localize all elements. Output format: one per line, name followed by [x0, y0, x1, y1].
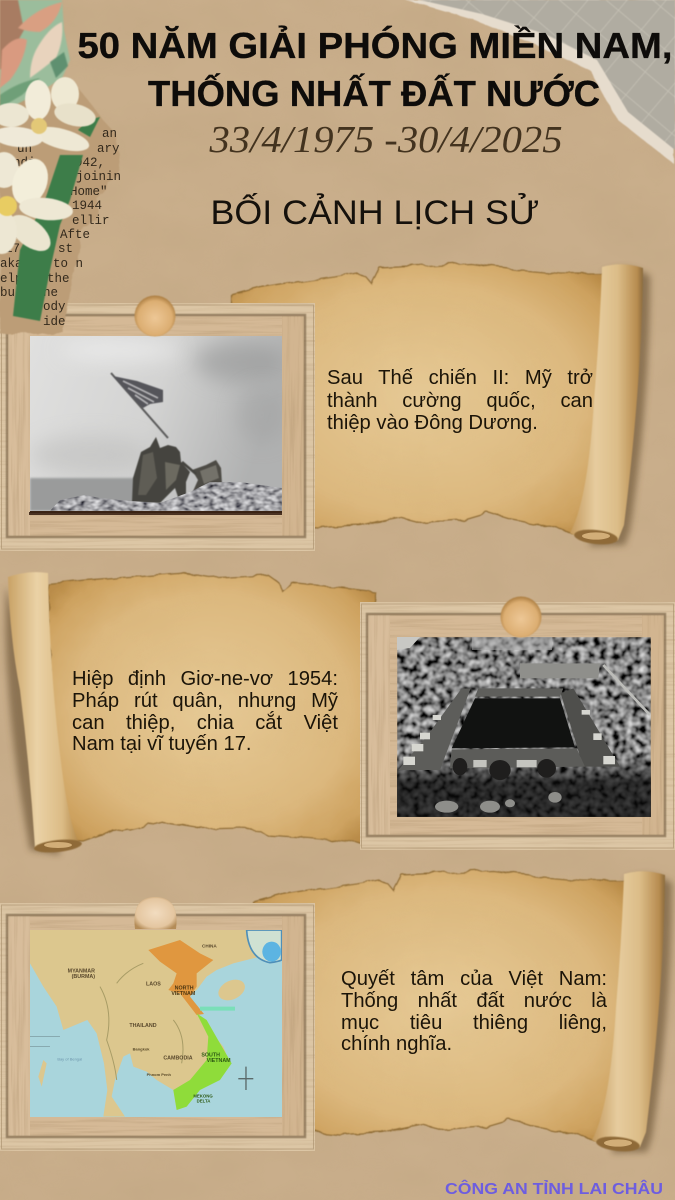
newspaper scrap: un — [17, 142, 32, 156]
text block: scroll 3: Thống nhất đất nước là — [341, 990, 607, 1012]
tables — [398, 663, 650, 813]
photo: flag raising — [29, 336, 287, 513]
newspaper scrap: to n — [53, 257, 83, 271]
frame 1 — [0, 303, 315, 551]
text block: scroll 3: mục tiêu thiêng liêng, — [341, 1012, 607, 1034]
footer credit: CÔNG AN TỈNH LAI CHÂU — [445, 1180, 663, 1198]
text block: scroll 2: Nam tại vĩ tuyến 17. — [72, 733, 252, 755]
land — [30, 930, 282, 1117]
newspaper scrap: he — [43, 286, 58, 300]
date range: 33/4/1975 -30/4/2025 — [208, 119, 562, 161]
south Vietnam — [173, 1013, 232, 1110]
text block: scroll 1 — [327, 367, 593, 434]
newspaper scrap: 942, — [75, 156, 105, 170]
map labels: DELTA — [197, 1099, 211, 1104]
leaf stem — [13, 117, 100, 321]
text block: scroll 1: thành cường quốc, can — [327, 390, 593, 412]
text block: scroll 3 — [341, 968, 607, 1055]
panel: scroll 1 — [232, 263, 650, 546]
map labels: CAMBODIA — [163, 1056, 193, 1062]
flag — [111, 373, 168, 438]
newspaper scrap: aka — [0, 257, 23, 271]
map labels: VIETNAM — [171, 991, 196, 997]
pin 2 — [500, 596, 542, 638]
newspaper scrap: bu — [0, 286, 15, 300]
map labels: VIETNAM — [207, 1058, 231, 1064]
newspaper scrap: ide — [43, 315, 66, 329]
map labels: NORTH — [175, 985, 194, 991]
map labels: Phnom Penh — [147, 1072, 172, 1077]
text block: scroll 2: can thiệp, chia cắt Việt — [72, 712, 338, 734]
map labels: CHINA — [202, 943, 217, 948]
flower: lower lily — [0, 152, 74, 258]
newspaper scrap: joinin — [76, 170, 121, 184]
panel: scroll 2 — [6, 572, 375, 855]
title: THỐNG NHẤT ĐẤT NƯỚC — [148, 72, 600, 114]
newspaper scrap: st — [58, 242, 73, 256]
flower: upper lily — [0, 77, 98, 156]
newspaper scrap: 1944 — [72, 199, 102, 213]
text block: scroll 3: chính nghĩa. — [341, 1033, 452, 1055]
photo: Geneva conference — [397, 637, 651, 817]
newspaper scrap: ary — [97, 142, 120, 156]
newspaper scrap: Home" — [70, 185, 108, 199]
text block: scroll 2: Hiệp định Giơ-ne-vơ 1954: — [72, 668, 338, 690]
text block: scroll 2: Pháp rút quân, nhưng Mỹ — [72, 690, 338, 712]
newspaper scrap: Bu — [3, 228, 18, 242]
torn plaid paper, top right — [405, 0, 675, 165]
foliage and buds — [0, 0, 70, 112]
map labels: MEKONG — [193, 1093, 213, 1098]
north Vietnam — [148, 940, 213, 1015]
pin 3 — [134, 897, 177, 929]
newspaper scrap: ellir — [72, 214, 110, 228]
newspaper scrap: ndi — [13, 156, 36, 170]
section heading: BỐI CẢNH LỊCH SỬ — [210, 193, 540, 232]
map labels: LAOS — [146, 982, 161, 988]
rubble — [50, 482, 282, 511]
newspaper scrap: the — [47, 272, 70, 286]
collage: newspaper scrap and flowers — [0, 0, 121, 334]
map labels: Bay of Bengal — [57, 1057, 82, 1062]
map labels: Bangkok — [133, 1047, 150, 1052]
map labels: (BURMA) — [72, 974, 95, 980]
map labels: MYANMAR — [68, 968, 95, 974]
newspaper scrap: ody — [43, 300, 66, 314]
newspaper scrap: elp — [0, 272, 23, 286]
photo: map of Vietnam — [30, 930, 282, 1117]
newspaper scrap: Afte — [60, 228, 90, 242]
text block: scroll 2 — [72, 668, 338, 755]
newspaper scrap: 17 — [5, 242, 20, 256]
inset globe — [247, 930, 282, 963]
map labels — [57, 943, 231, 1104]
soldiers — [132, 437, 222, 503]
newspaper scrap — [0, 90, 121, 334]
frame 2 — [360, 602, 675, 850]
pin 1 — [134, 296, 176, 336]
title: 50 NĂM GIẢI PHÓNG MIỀN NAM, — [78, 24, 672, 66]
panel: scroll 3 — [254, 870, 672, 1153]
map labels: THAILAND — [129, 1023, 157, 1029]
text block: scroll 3: Quyết tâm của Việt Nam: — [341, 968, 607, 990]
newspaper scrap: an — [102, 127, 117, 141]
frame 3 — [0, 903, 315, 1151]
map labels: SOUTH — [201, 1052, 220, 1058]
title — [78, 24, 672, 114]
text block: scroll 1: thiệp vào Đông Dương. — [327, 412, 538, 434]
text block: scroll 1: Sau Thế chiến II: Mỹ trở — [327, 367, 593, 389]
